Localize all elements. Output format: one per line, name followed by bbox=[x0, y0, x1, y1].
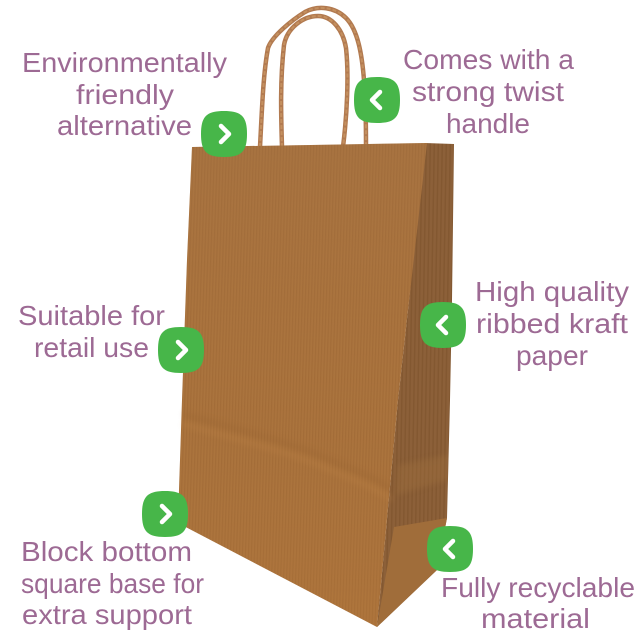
text: environmentally friendly alternative: alternative bbox=[57, 110, 192, 141]
text: block bottom square base for extra support: square base for bbox=[21, 568, 204, 599]
text: comes with a strong twist handle bbox=[403, 44, 575, 139]
text: fully recyclable material: Fully recyclable bbox=[441, 572, 635, 603]
text: suitable for retail use bbox=[18, 300, 165, 363]
text: high quality ribbed kraft paper: High quality bbox=[475, 276, 629, 307]
text: environmentally friendly alternative: friendly bbox=[76, 79, 174, 110]
gusset crease highlight bbox=[400, 458, 446, 491]
text: high quality ribbed kraft paper: paper bbox=[516, 340, 588, 371]
twist handle: front bbox=[281, 16, 347, 147]
text: environmentally friendly alternative: Environmentally bbox=[22, 47, 227, 78]
text: high quality ribbed kraft paper bbox=[475, 276, 629, 371]
text: comes with a strong twist handle: handle bbox=[446, 108, 530, 139]
bag side gusset bbox=[377, 143, 454, 627]
text: high quality ribbed kraft paper: ribbed kraft bbox=[476, 308, 628, 339]
text: environmentally friendly alternative bbox=[22, 47, 227, 141]
icon: left arrow button, twist handle bbox=[354, 77, 400, 123]
icon: left arrow button, recyclable bbox=[427, 526, 473, 572]
twist handle: back bbox=[260, 8, 366, 147]
kraft paper bag bbox=[178, 8, 454, 627]
text: suitable for retail use: Suitable for bbox=[18, 300, 165, 331]
text: block bottom square base for extra support bbox=[21, 536, 204, 630]
icon: left arrow button, ribbed kraft paper bbox=[420, 302, 466, 348]
front panel crease bbox=[183, 414, 392, 490]
icon: right arrow button, environmentally friendly bbox=[201, 111, 247, 157]
text: comes with a strong twist handle: strong twist bbox=[412, 76, 564, 107]
icon: right arrow button, retail use bbox=[158, 327, 204, 373]
text: block bottom square base for extra support: Block bottom bbox=[21, 536, 192, 567]
icon: right arrow button, block bottom bbox=[142, 491, 188, 537]
text: suitable for retail use: retail use bbox=[34, 332, 149, 363]
text: comes with a strong twist handle: Comes with a bbox=[403, 44, 575, 75]
bag floor fold bbox=[377, 518, 447, 627]
text: fully recyclable material bbox=[441, 572, 635, 634]
text: block bottom square base for extra support: extra support bbox=[22, 599, 192, 630]
text: fully recyclable material: material bbox=[481, 603, 590, 634]
bag front panel bbox=[178, 143, 427, 627]
